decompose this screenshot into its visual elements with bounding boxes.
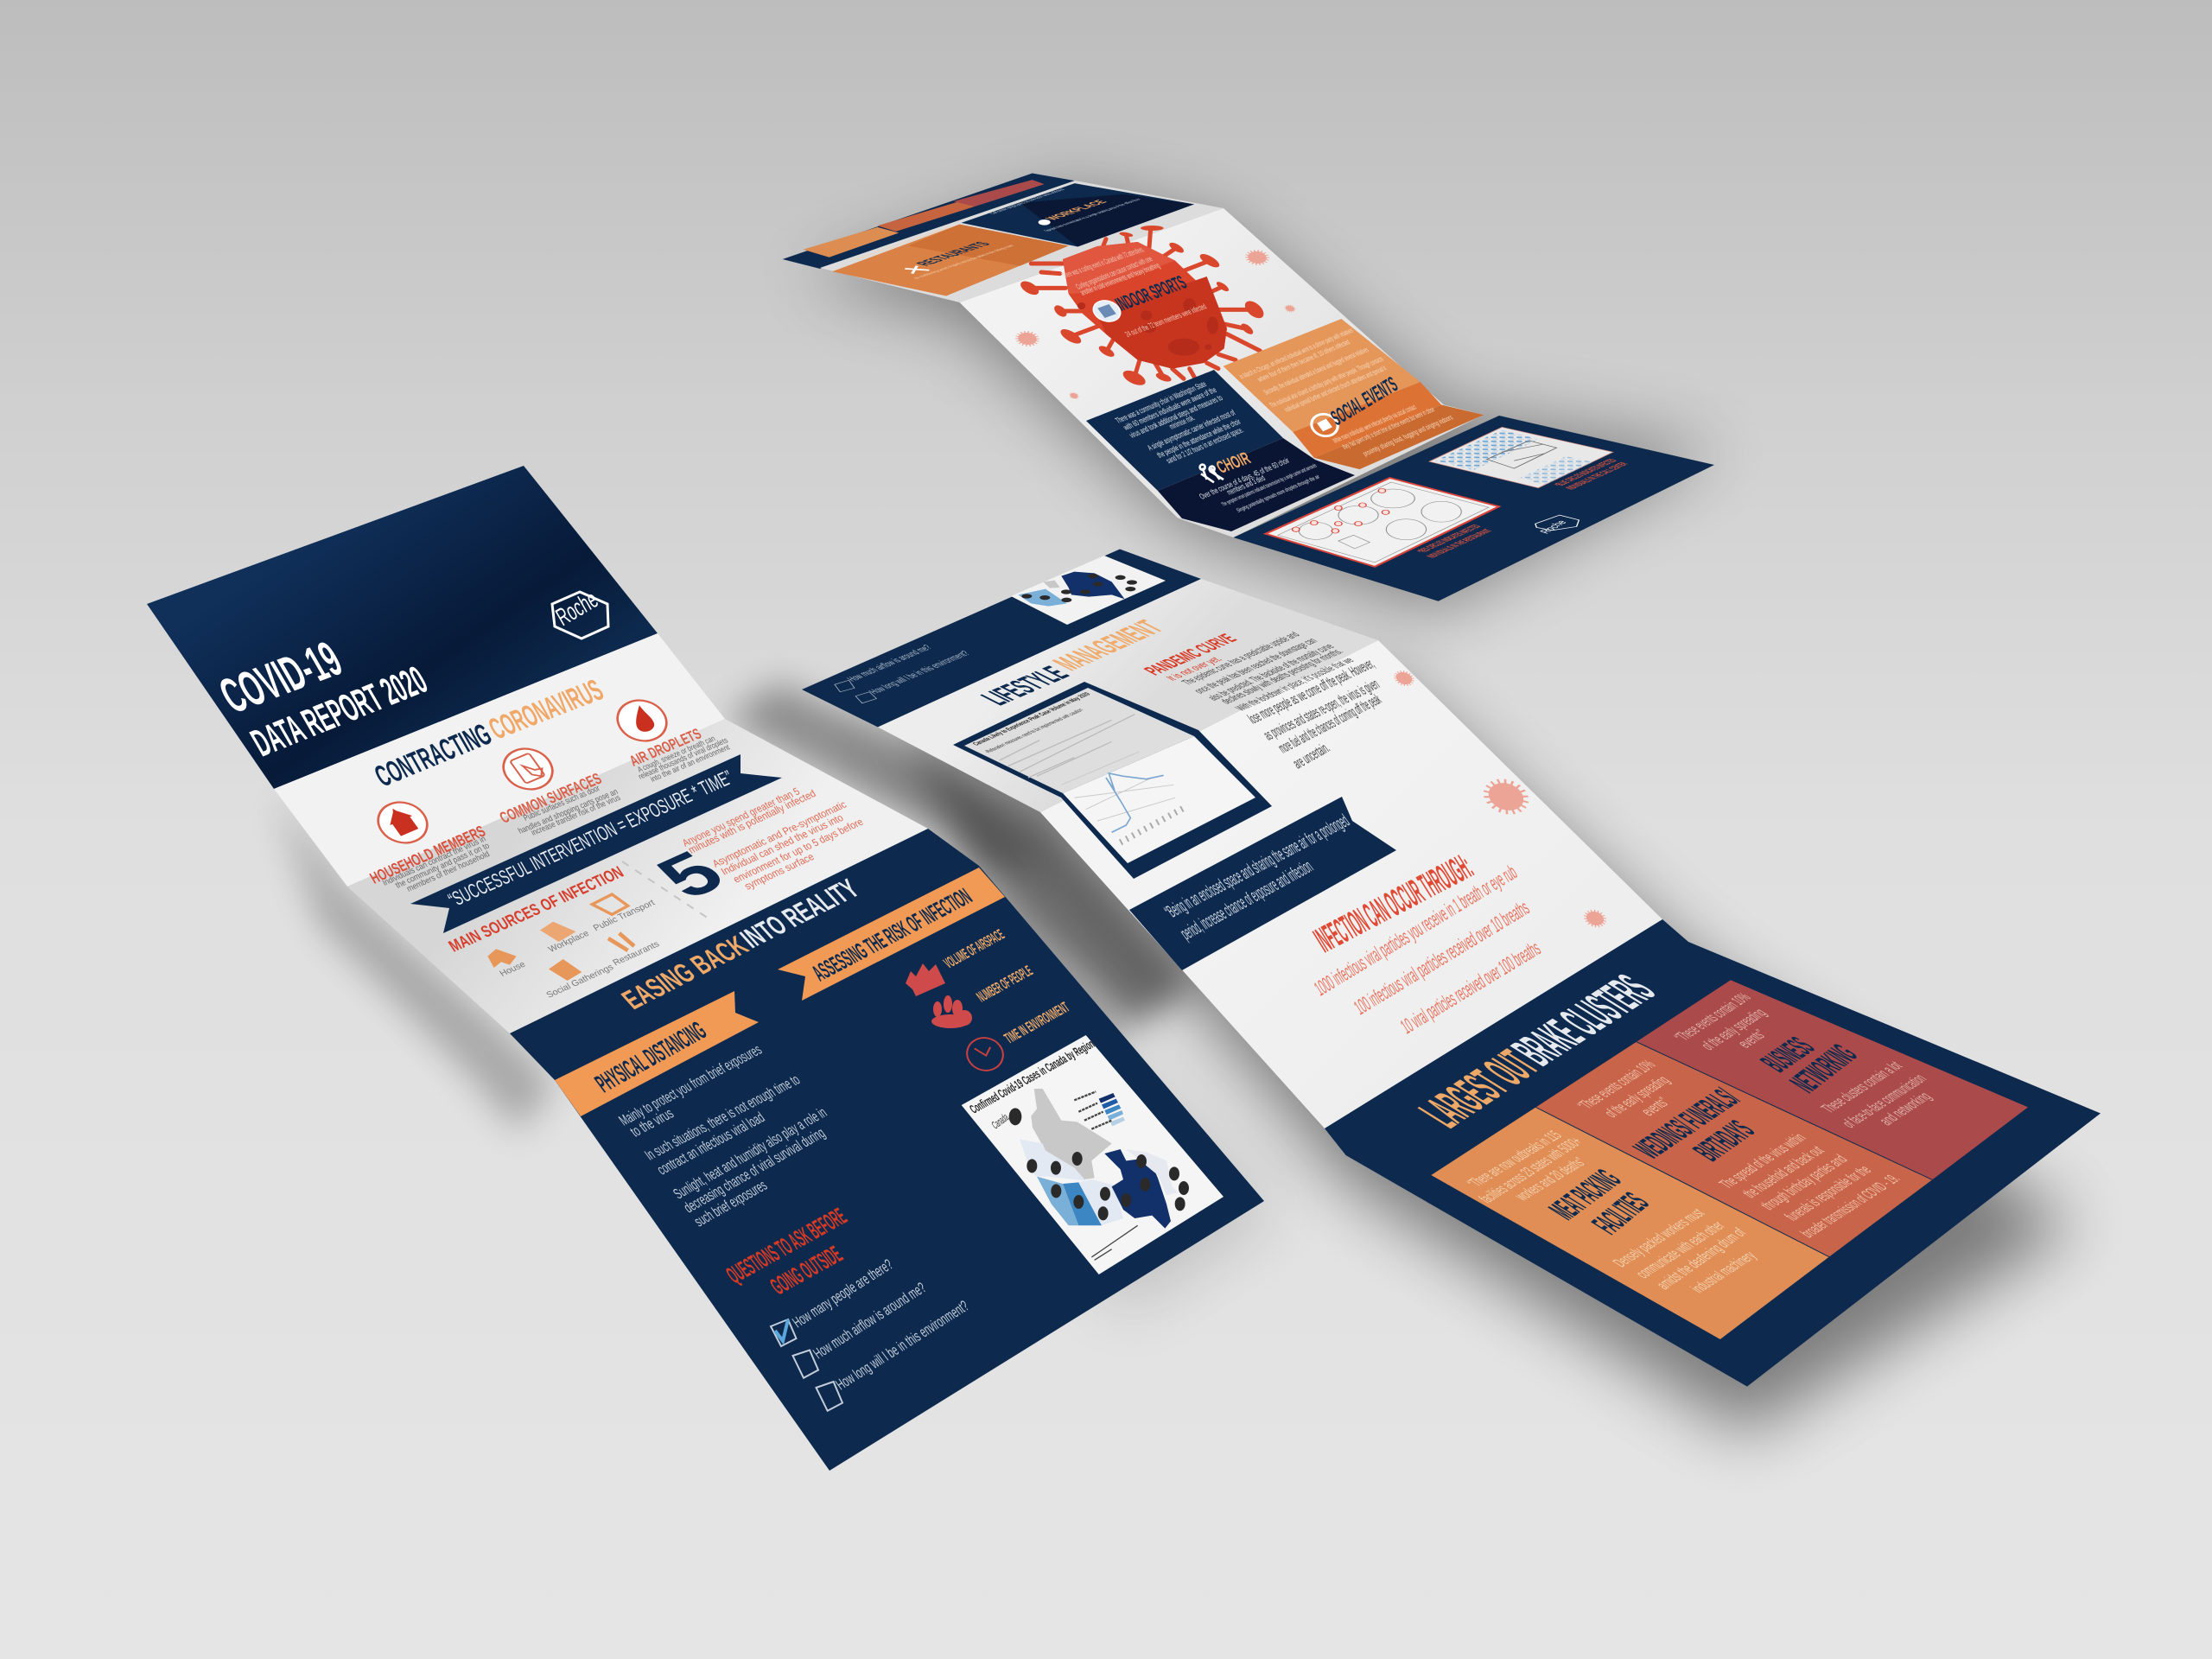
heading: contracting coronavirus: CONTRACTING xyxy=(369,717,498,793)
card: choir: There was a community choir in Washington State xyxy=(1114,380,1209,425)
cluster: weddings funerals birthdays: BIRTHDAYS xyxy=(1685,1115,1763,1166)
map card: cases in Canada xyxy=(962,1035,1224,1274)
pandemic curve text xyxy=(1140,630,1384,772)
map card continuation xyxy=(1011,556,1166,625)
logo: Roche xyxy=(551,586,608,639)
household members block: the community and pass it on to xyxy=(394,842,492,891)
brochure: top right, back side: INDIVIDUALS IN THE RESTAURANT xyxy=(1423,528,1495,559)
brochure: left, cover side: VOLUME OF AIRSPACE xyxy=(940,926,1007,971)
ribbon: successful intervention xyxy=(410,754,782,933)
physical distancing text: Sunlight, heat and humidity also play a role in xyxy=(670,1104,830,1202)
heading: largest outbrake clusters xyxy=(1406,966,1668,1135)
brochure: center, inner side: “These events contain 10% xyxy=(1671,990,1755,1045)
heading: questions to ask xyxy=(721,1204,852,1300)
indoor sports text: INDOOR SPORTS xyxy=(1111,272,1191,315)
brochure: center, inner side: BRAKE CLUSTERS xyxy=(1498,966,1668,1073)
cluster: meat packing: industrial machinery xyxy=(1688,1249,1761,1296)
icon: house xyxy=(487,949,517,968)
card: choir: members and 3 died xyxy=(1225,474,1268,497)
card: choir xyxy=(1086,370,1355,531)
card: choir: with 60 members individuals were aware of the xyxy=(1122,386,1219,433)
brochure: top right, back side: INDIVIDUALS IN THE CALL CENTER xyxy=(1562,461,1630,491)
five minutes text: environment for up to 5 days before xyxy=(731,816,866,885)
common surfaces block: increase transfer risk of the virus xyxy=(530,793,622,838)
five minutes text: Anyone you spend greater than 5 xyxy=(680,785,802,849)
ribbon: physical distancing: PHYSICAL DISTANCING xyxy=(589,1016,712,1098)
icon: number of people xyxy=(931,995,972,1028)
cluster panels xyxy=(1431,980,2028,1339)
brochure: left, cover side xyxy=(147,466,1264,1471)
heading: contracting coronavirus: CORONAVIRUS xyxy=(483,672,609,746)
physical distancing text: decreasing chance of viral survival during xyxy=(680,1125,829,1216)
risk factor labels: NUMBER OF PEOPLE xyxy=(973,963,1036,1005)
cluster: meat packing: FACILITIES xyxy=(1584,1186,1656,1240)
source labels: Restaurants xyxy=(612,940,662,968)
household members block: HOUSEHOLD MEMBERS xyxy=(367,823,489,887)
cluster: business networking: of the early spreading xyxy=(1697,1006,1770,1053)
chart card: Canada Likely to Experience Peak Case Volume in May 2020 xyxy=(970,691,1092,747)
card: social events: In March in Chicago, an infected individual went to a dinner party with relatives xyxy=(1237,327,1355,381)
brochure: center, inner side: MANAGEMENT xyxy=(1046,616,1172,675)
cluster: weddings funerals birthdays: the household and back out xyxy=(1739,1143,1828,1201)
cluster: meat packing: workers and 20 deaths” xyxy=(1510,1155,1591,1204)
cluster: meat packing xyxy=(1464,1128,1761,1296)
brochure: left, cover side: QUESTIONS TO ASK BEFORE xyxy=(721,1204,852,1289)
common surfaces block: Public surfaces such as door xyxy=(522,784,602,823)
chart card xyxy=(953,682,1272,879)
chart card: -Relaxation measures need to be implemented with caution xyxy=(982,708,1085,754)
cluster: meat packing: Densely packed workers must xyxy=(1610,1206,1709,1270)
cluster: meat packing: communicate with each other xyxy=(1632,1218,1729,1281)
big virus illustration xyxy=(1019,226,1267,388)
card: social events: they had spent only a short time at these events but were in close xyxy=(1340,405,1436,451)
card: social events: individual spread further and infected church attendees and spread it xyxy=(1282,364,1388,414)
brochure: center, inner side: “Being in an enclosed space and sharing the same air for a prolonged xyxy=(1160,810,1353,922)
big number five: 5 xyxy=(639,838,741,911)
cluster: business networking xyxy=(1671,990,1936,1131)
card: restaurants: Air conditioning carried droplets across the tables in the dining room xyxy=(912,245,1016,279)
card: restaurants: RESTAURANTS xyxy=(912,240,995,267)
source labels: Workplace xyxy=(547,929,591,955)
physical distancing text xyxy=(615,1041,830,1230)
brochure: center, inner side: as provinces and states re-open, the virus is given xyxy=(1260,676,1382,743)
quote banner: period, increase chance of exposure and infection xyxy=(1176,856,1317,944)
brochure: center, inner side: The epidemic curve has a predictable upside and xyxy=(1179,630,1302,686)
brochure: left, cover side: ASSESSING THE RISK OF INFECTION xyxy=(807,884,976,986)
brochure: center, inner side: facilities across 23 states with 5000+ xyxy=(1476,1135,1586,1206)
air droplets block: release thousands of viral droplets xyxy=(637,736,730,782)
ribbon: successful intervention: “SUCCESSFUL INTERVENTION = EXPOSURE * TIME” xyxy=(444,766,737,912)
card: social events: SOCIAL EVENTS xyxy=(1327,372,1402,430)
air droplets block: AIR DROPLETS xyxy=(626,725,704,769)
pandemic curve text: also be predicted. The backside of the mortality curve xyxy=(1205,642,1337,702)
card: restaurants xyxy=(832,225,1069,296)
heading: main sources of infection: MAIN SOURCES OF INFECTION xyxy=(446,863,627,956)
cluster: business networking: NETWORKING xyxy=(1782,1039,1866,1098)
heading: largest outbrake clusters: LARGEST OUT xyxy=(1406,1041,1551,1135)
icon: social gatherings xyxy=(549,959,582,981)
cluster: weddings funerals birthdays: of the early spreading xyxy=(1600,1073,1674,1121)
quote banner xyxy=(1129,797,1396,970)
source labels: House xyxy=(499,960,528,979)
divider xyxy=(622,861,711,920)
card: choir: the people in the attendance while the choir xyxy=(1155,417,1243,460)
ribbon: physical distancing xyxy=(555,991,759,1116)
brochure: left, cover side: DATA REPORT 2020 xyxy=(244,658,435,765)
floor plan: call center xyxy=(1429,427,1613,488)
checklist: How much airflow is around me? xyxy=(810,1279,929,1362)
card: workplace: Call center employees on one floor were infected xyxy=(988,188,1066,214)
card: social events: Secondly, the individual attended a funeral and hugged several relatives xyxy=(1262,346,1370,397)
card: workplace xyxy=(962,183,1194,246)
checklist continuation: How much airflow is around me? xyxy=(843,643,935,683)
brochure: center, inner side: of face-to-face communication xyxy=(1839,1071,1930,1131)
map card: cases in Canada: Canada xyxy=(989,1110,1011,1131)
card: workplace: WORKPLACE xyxy=(1042,199,1110,221)
pandemic curve text: declines slowly with deaths persisting for months. xyxy=(1217,647,1346,705)
cluster: business networking: BUSINESS xyxy=(1752,1032,1822,1077)
common surfaces block: COMMON SURFACES xyxy=(497,770,605,827)
cluster: business networking: and networking xyxy=(1875,1090,1936,1128)
panel: white contracting section xyxy=(274,633,725,887)
brochure: center, inner side xyxy=(802,550,2101,1387)
card: choir: virus and took additional steps and measures to xyxy=(1128,394,1225,440)
panel: white virus section xyxy=(959,208,1444,518)
brochure: top right, back side: *RED CIRCLES INDICATES INFECTED xyxy=(1414,524,1484,554)
common surfaces block: handles and shopping carts pose an xyxy=(517,787,620,836)
cluster: weddings funerals birthdays: through birthday parties and xyxy=(1758,1153,1852,1213)
five minutes text: Asymptomatic and Pre-symptomatic xyxy=(710,798,849,869)
indoor sports text: 24 out of the 72 team members were infected xyxy=(1123,302,1209,339)
card: choir: Over the course of 4 days, 45 of the 60 choir xyxy=(1198,456,1292,501)
brochure: left, cover side: TIME IN ENVIRONMENT xyxy=(1001,999,1072,1046)
pandemic curve text: With the lockdown in place, it's possible that we xyxy=(1232,656,1357,712)
cluster: weddings funerals birthdays: The spread of the virus within xyxy=(1716,1131,1810,1192)
checklist: How many people are there? xyxy=(789,1256,896,1331)
five minutes text: Individual can shed the virus into xyxy=(719,812,846,877)
brochure: top right, back side xyxy=(783,174,1714,601)
title xyxy=(210,631,435,765)
restaurant caption xyxy=(1414,524,1495,559)
cluster: meat packing: amidst the deafening drum of xyxy=(1653,1225,1751,1293)
brochure: top right, back side: Restaurant patrons seated along the airflow were infected by one asymptomatic carrier xyxy=(852,226,955,260)
icon: workplace xyxy=(540,922,576,942)
checklist: How long will I be in this environment? xyxy=(832,1298,972,1393)
icon: restaurants xyxy=(608,933,634,950)
physical distancing text: Mainly to protect you from brief exposures xyxy=(615,1041,765,1128)
cluster: weddings funerals birthdays: events” xyxy=(1637,1095,1675,1119)
five minutes text: minutes with is potentially infected xyxy=(686,788,818,855)
risk factor labels xyxy=(940,926,1072,1046)
indoor sports text xyxy=(1060,245,1209,339)
brochure: center, inner side: broader transmission of COVID - 19. xyxy=(1797,1172,1904,1241)
icon: small viruses xyxy=(1389,668,1611,931)
household members block: Individuals can contract the virus in xyxy=(381,835,488,888)
floor plan: restaurant xyxy=(1266,478,1499,567)
cluster: weddings funerals birthdays: funerals is responsible for the xyxy=(1781,1163,1876,1224)
brochure: center, inner side: WEDDINGS/ FUNERALS/ xyxy=(1625,1083,1748,1164)
panel: lower fold strip xyxy=(1178,404,1484,537)
heading: easing back into reality: EASING BACK xyxy=(615,931,755,1015)
physical distancing text: In such situations, there is not enough time to xyxy=(641,1071,804,1163)
card: choir: minimise risk. xyxy=(1167,414,1197,431)
five minutes text: symptoms surface xyxy=(742,851,817,892)
card: social events xyxy=(1224,319,1484,469)
icon: volume of airspace xyxy=(906,963,945,996)
title: COVID-19 xyxy=(210,631,352,723)
common surfaces block xyxy=(497,770,622,838)
brochure: center, inner side: 100 infectious viral particles received over 10 breaths xyxy=(1351,897,1534,1020)
infection routes xyxy=(1307,847,1545,1039)
indoor sports text: another in cold environments and heavy breathing xyxy=(1078,262,1162,297)
panel: navy top strip xyxy=(783,174,1075,269)
cluster: business networking: events” xyxy=(1734,1027,1771,1051)
panel: navy top strip xyxy=(802,550,1201,728)
card: social events: The individual also shared a birthday party with other people. Through contacts xyxy=(1268,355,1385,410)
shadows xyxy=(276,190,2074,1434)
icon: small viruses xyxy=(1011,247,1298,400)
pandemic curve text: PANDEMIC CURVE xyxy=(1140,632,1243,678)
panel: navy cover xyxy=(147,466,658,789)
brochure: top right, back side: There was a curling event in Canada with 72 attendees. xyxy=(1060,245,1147,280)
card: workplace: Spread was concentrated in a single seating area of the office floor xyxy=(1043,198,1143,232)
panel: gray sources section xyxy=(347,719,928,1033)
heading: easing back into reality: INTO REALITY xyxy=(734,874,866,954)
brochure: top right, back side: *BLUE CIRCLES INDICATES INFECTED xyxy=(1551,458,1619,487)
household members block: members of their household xyxy=(405,849,492,894)
panel: navy bottom section xyxy=(1234,416,1714,601)
card: social events: While many individuals were infected directly via social contact xyxy=(1331,403,1418,445)
air droplets block xyxy=(626,725,732,785)
brochure: center, inner side: lose more people as we come off the peak. However, xyxy=(1244,655,1377,727)
physical distancing text: such brief exposures xyxy=(690,1177,770,1230)
source labels: Social Gatherings xyxy=(545,963,615,1000)
heading: lifestyle management: LIFESTYLE xyxy=(974,663,1077,709)
brochure: center, inner side: “There are now outbreaks in 115 xyxy=(1464,1128,1567,1191)
logo: Roche: Roche xyxy=(551,586,603,632)
card: social events: proximity sharing food, hugging and singing indoors xyxy=(1361,413,1455,458)
checklist xyxy=(771,1256,972,1411)
card: choir: Singing potentially spreads more droplets through the air xyxy=(1236,474,1321,514)
source labels xyxy=(499,899,662,1000)
cluster: weddings funerals birthdays xyxy=(1574,1058,1904,1241)
map card: cases in Canada: Confirmed Covid-19 Cases in Canada by Region xyxy=(967,1037,1097,1116)
pandemic curve text: are uncertain. xyxy=(1289,740,1333,772)
call center caption xyxy=(1551,458,1630,491)
cluster: meat packing: MEAT PACKING xyxy=(1541,1164,1630,1225)
icon: common surfaces xyxy=(494,742,562,796)
brochure: center, inner side: INFECTION CAN OCCUR THROUGH: xyxy=(1307,847,1479,960)
card: choir: CHOIR xyxy=(1213,448,1254,477)
pandemic curve text: It is not over yet. xyxy=(1163,654,1225,682)
panel: navy easing back section xyxy=(510,829,1264,1471)
brochure: center, inner side: 10 viral particles received over 100 breaths xyxy=(1397,937,1545,1039)
brochure: center, inner side: 1000 infectious viral particles you receive in 1 breath or eye rub xyxy=(1311,861,1521,1001)
air droplets block: into the air of an environment xyxy=(649,743,732,785)
icon: public transport xyxy=(592,894,628,914)
card: social events: where four of them then became ill, 10 others infected xyxy=(1255,338,1351,384)
icon: air droplets xyxy=(608,694,676,747)
checklist continuation: How long will I be in this environment? xyxy=(866,649,973,696)
indoor sports text: Curling organisations can cause contact with one xyxy=(1074,255,1154,291)
brochure: center, inner side: “These events contain 10% xyxy=(1574,1058,1660,1113)
card: choir: A single asymptomatic carrier infected most of xyxy=(1146,409,1237,453)
pandemic curve text: once the peak has been reached the downstage can xyxy=(1191,636,1320,695)
panel: gray lifestyle section xyxy=(878,579,1378,812)
checklist continuation xyxy=(835,643,973,703)
icon: time in environment xyxy=(960,1032,1010,1077)
brochure: left, cover side: GOING OUTSIDE xyxy=(766,1242,848,1300)
air droplets block: A cough, sneeze or breath can xyxy=(636,734,717,775)
household members block xyxy=(367,823,492,894)
icon: household xyxy=(369,796,436,849)
logo: Roche: Roche xyxy=(1537,519,1569,535)
ribbon: assessing the risk of infection xyxy=(778,868,1005,1001)
five minutes text xyxy=(680,785,866,892)
card: choir: sand for 2 1/2 hours in an enclosed space. xyxy=(1165,426,1246,466)
cluster: business networking: These clusters contain a lot xyxy=(1818,1058,1906,1116)
physical distancing text: to the virus xyxy=(626,1105,677,1140)
panel: gray fold section xyxy=(820,181,1224,302)
card: choir: The symptom onset patterns indicated transmission by a single carrier and aerosols xyxy=(1221,463,1319,508)
panel: white infection section xyxy=(1040,640,1662,1128)
physical distancing text: contract an infectious viral load xyxy=(653,1109,768,1178)
brochure: center, inner side: more fuel and the chances of coming off the peak xyxy=(1274,691,1384,756)
panel: navy clusters section xyxy=(1325,919,2101,1387)
source labels: Public Transport xyxy=(592,899,657,933)
